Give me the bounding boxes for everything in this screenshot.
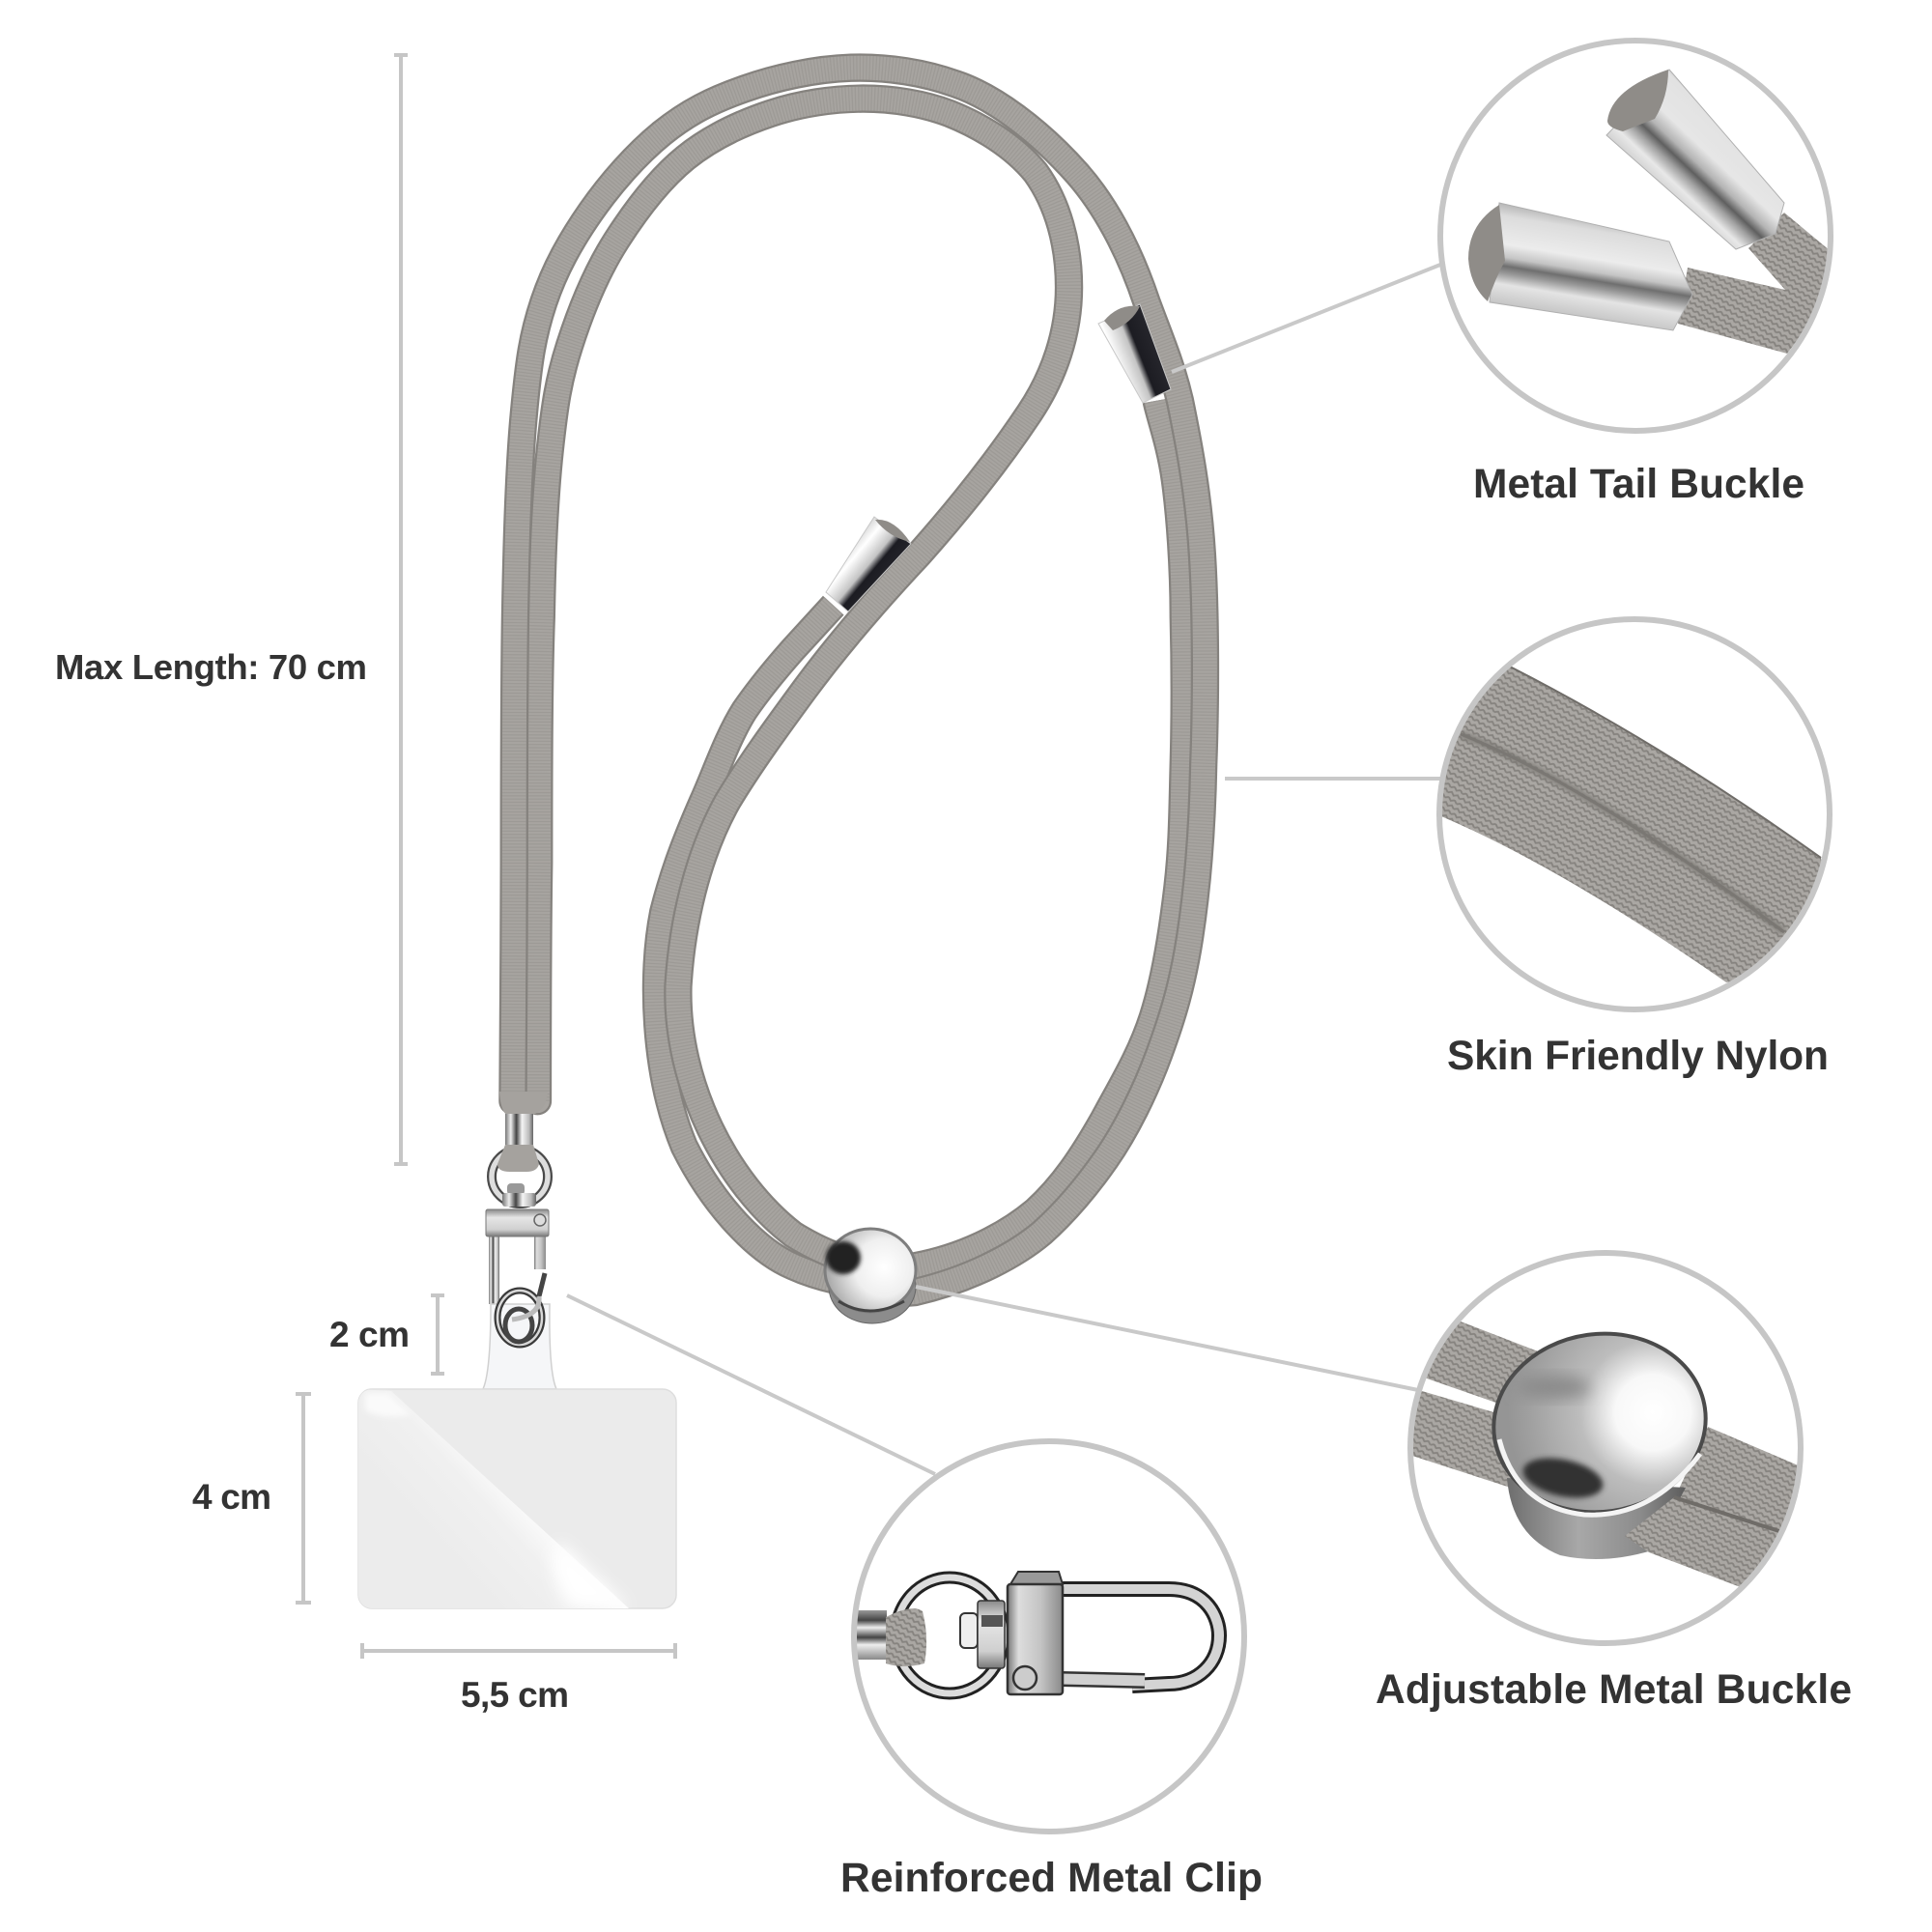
upper metal tip xyxy=(1606,70,1784,249)
lower tip end face xyxy=(1468,205,1505,301)
panel: metal tail buckle xyxy=(1440,41,1831,431)
disc rim xyxy=(1499,1439,1700,1515)
label: 2 cm: 2 cm xyxy=(329,1315,410,1354)
hook xyxy=(1063,1589,1219,1686)
block top xyxy=(1010,1572,1063,1584)
braided cord xyxy=(1678,213,1831,354)
top shadow xyxy=(1510,667,1821,858)
ring xyxy=(854,1441,1244,1832)
4 cm dimension line xyxy=(296,1393,311,1604)
heading: metal tail buckle: Metal Tail Buckle xyxy=(1473,462,1804,507)
ferrule xyxy=(857,1610,887,1660)
film diagonal highlight xyxy=(358,1389,629,1608)
split rings xyxy=(497,1291,542,1345)
swivel base xyxy=(507,1183,525,1195)
buckle disc xyxy=(1492,1331,1708,1513)
2 cm dimension line xyxy=(431,1294,444,1375)
swivel ring xyxy=(492,1150,548,1204)
phone card patch with tab xyxy=(358,1291,676,1608)
upper tip end face xyxy=(1607,70,1668,131)
panel: adjustable metal buckle xyxy=(1391,1253,1816,1643)
leader line: clip xyxy=(567,1295,935,1474)
strap end joint, ferrule and swivel clip xyxy=(486,1092,549,1304)
reflections xyxy=(1520,1452,1606,1504)
card xyxy=(358,1389,676,1608)
leader line: tail buckle xyxy=(1172,265,1440,372)
cord loop xyxy=(886,1608,926,1666)
heading: reinforced metal clip: Reinforced Metal Clip xyxy=(840,1856,1263,1901)
cords xyxy=(1426,1321,1538,1403)
panel: reinforced metal clip xyxy=(850,1441,1244,1832)
swivel ring xyxy=(895,1577,1004,1693)
heading: adjustable metal buckle: Adjustable Metal Buckle xyxy=(1376,1667,1852,1713)
panel: skin friendly nylon xyxy=(1420,619,1835,1009)
ring xyxy=(1440,41,1831,431)
screw xyxy=(1013,1666,1037,1690)
label: 5,5 cm: 5,5 cm xyxy=(461,1675,569,1715)
ferrule xyxy=(505,1114,533,1145)
cord loop xyxy=(497,1145,539,1172)
swivel nub xyxy=(960,1613,978,1648)
label: max length: Max Length: 70 cm xyxy=(55,647,367,687)
cord band xyxy=(1420,667,1835,982)
heading: skin friendly nylon: Skin Friendly Nylon xyxy=(1447,1034,1829,1079)
clip legs xyxy=(489,1236,499,1304)
tab xyxy=(483,1304,556,1389)
metal tail tip upper xyxy=(1098,304,1171,403)
block xyxy=(1008,1584,1063,1694)
ring xyxy=(1410,1253,1801,1643)
label: 4 cm: 4 cm xyxy=(192,1477,271,1517)
lower metal tip xyxy=(1490,203,1692,330)
max length dimension line xyxy=(394,54,408,1165)
lower right cord xyxy=(1625,1497,1776,1586)
swivel collar xyxy=(978,1601,1005,1668)
5,5 cm dimension line xyxy=(361,1643,675,1659)
leader line: nylon xyxy=(1225,777,1440,781)
ring xyxy=(1439,619,1830,1009)
clip block xyxy=(486,1209,549,1236)
strap end xyxy=(499,1092,548,1115)
buckle body xyxy=(1507,1478,1686,1559)
gate xyxy=(1061,1679,1145,1681)
lanyard cord xyxy=(513,68,1205,1297)
adjustable buckle on cord xyxy=(825,1229,916,1323)
metal tail tip lower xyxy=(826,517,911,611)
seam xyxy=(1461,734,1784,932)
cord seam xyxy=(1674,1497,1782,1532)
leader line: adjustable buckle xyxy=(916,1287,1418,1390)
